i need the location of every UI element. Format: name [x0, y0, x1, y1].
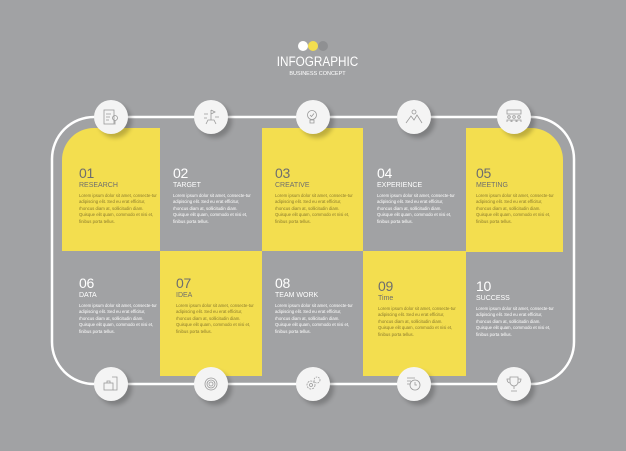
step 02: [173, 165, 251, 224]
step 03: CREATIVE: [275, 182, 310, 189]
step 07: [176, 275, 254, 334]
step 06: 06: [79, 275, 94, 291]
step 08: [275, 275, 353, 334]
step 10: SUCCESS: [476, 295, 510, 302]
step 04: Lorem ipsum dolor sit amet, consecte-tur adipiscing elit. Sed eu erat efficitur, rhoncus diam at, sollicitudin diam. Quisque elit quam, commodo et nisi et, finibus porta tellus.: [377, 193, 455, 224]
step 09: Time: [378, 295, 393, 302]
step 08: TEAM WORK: [275, 292, 318, 299]
step 03: Lorem ipsum dolor sit amet, consecte-tur adipiscing elit. Sed eu erat efficitur, rhoncus diam at, sollicitudin diam. Quisque elit quam, commodo et nisi et, finibus porta tellus.: [275, 193, 353, 224]
step 10: [476, 278, 554, 337]
step 05: [476, 165, 554, 224]
step 10: Lorem ipsum dolor sit amet, consecte-tur adipiscing elit. Sed eu erat efficitur, rhoncus diam at, sollicitudin diam. Quisque elit quam, commodo et nisi et, finibus porta tellus.: [476, 306, 554, 337]
step 10: 10: [476, 278, 491, 294]
step 07: 07: [176, 275, 191, 291]
step 02: 02: [173, 165, 188, 181]
step 05: 05: [476, 165, 491, 181]
title block: INFOGRAPHIC: [277, 54, 358, 69]
yellow cells: [62, 128, 160, 251]
step 06: Lorem ipsum dolor sit amet, consecte-tur adipiscing elit. Sed eu erat efficitur, rhoncus diam at, sollicitudin diam. Quisque elit quam, commodo et nisi et, finibus porta tellus.: [79, 303, 157, 334]
step 02: TARGET: [173, 182, 201, 189]
title block: [277, 41, 358, 77]
step 04: EXPERIENCE: [377, 182, 422, 189]
icon: research document: [94, 100, 128, 134]
step 04: 04: [377, 165, 392, 181]
icon: success trophy: [497, 367, 531, 401]
step 08: Lorem ipsum dolor sit amet, consecte-tur adipiscing elit. Sed eu erat efficitur, rhoncus diam at, sollicitudin diam. Quisque elit quam, commodo et nisi et, finibus porta tellus.: [275, 303, 353, 334]
step 09: 09: [378, 278, 393, 294]
icon: time clock: [397, 367, 431, 401]
step 09: [378, 278, 456, 337]
step 01: 01: [79, 165, 94, 181]
icon: creative bulb: [296, 100, 330, 134]
icon: data briefcase: [94, 367, 128, 401]
step 08: 08: [275, 275, 290, 291]
icon: idea target: [194, 367, 228, 401]
step 05: Lorem ipsum dolor sit amet, consecte-tur adipiscing elit. Sed eu erat efficitur, rhoncus diam at, sollicitudin diam. Quisque elit quam, commodo et nisi et, finibus porta tellus.: [476, 193, 554, 224]
step 03: [275, 165, 353, 224]
icon: target flag: [194, 100, 228, 134]
step 07: Lorem ipsum dolor sit amet, consecte-tur adipiscing elit. Sed eu erat efficitur, rhoncus diam at, sollicitudin diam. Quisque elit quam, commodo et nisi et, finibus porta tellus.: [176, 303, 254, 334]
step 06: [79, 275, 157, 334]
step 02: Lorem ipsum dolor sit amet, consecte-tur adipiscing elit. Sed eu erat efficitur, rhoncus diam at, sollicitudin diam. Quisque elit quam, commodo et nisi et, finibus porta tellus.: [173, 193, 251, 224]
icon: dots: [298, 41, 328, 51]
step 01: Lorem ipsum dolor sit amet, consecte-tur adipiscing elit. Sed eu erat efficitur, rhoncus diam at, sollicitudin diam. Quisque elit quam, commodo et nisi et, finibus porta tellus.: [79, 193, 157, 224]
step 06: DATA: [79, 292, 97, 299]
title block: BUSINESS CONCEPT: [289, 71, 346, 77]
step 01: [79, 165, 157, 224]
icon: meeting: [497, 100, 531, 134]
step 07: IDEA: [176, 292, 192, 299]
step 03: 03: [275, 165, 290, 181]
step 09: Lorem ipsum dolor sit amet, consecte-tur adipiscing elit. Sed eu erat efficitur, rhoncus diam at, sollicitudin diam. Quisque elit quam, commodo et nisi et, finibus porta tellus.: [378, 306, 456, 337]
icon: teamwork gears: [296, 367, 330, 401]
step 05: MEETING: [476, 182, 508, 189]
step 04: [377, 165, 455, 224]
icon: experience mountains: [397, 100, 431, 134]
step 01: RESEARCH: [79, 182, 118, 189]
